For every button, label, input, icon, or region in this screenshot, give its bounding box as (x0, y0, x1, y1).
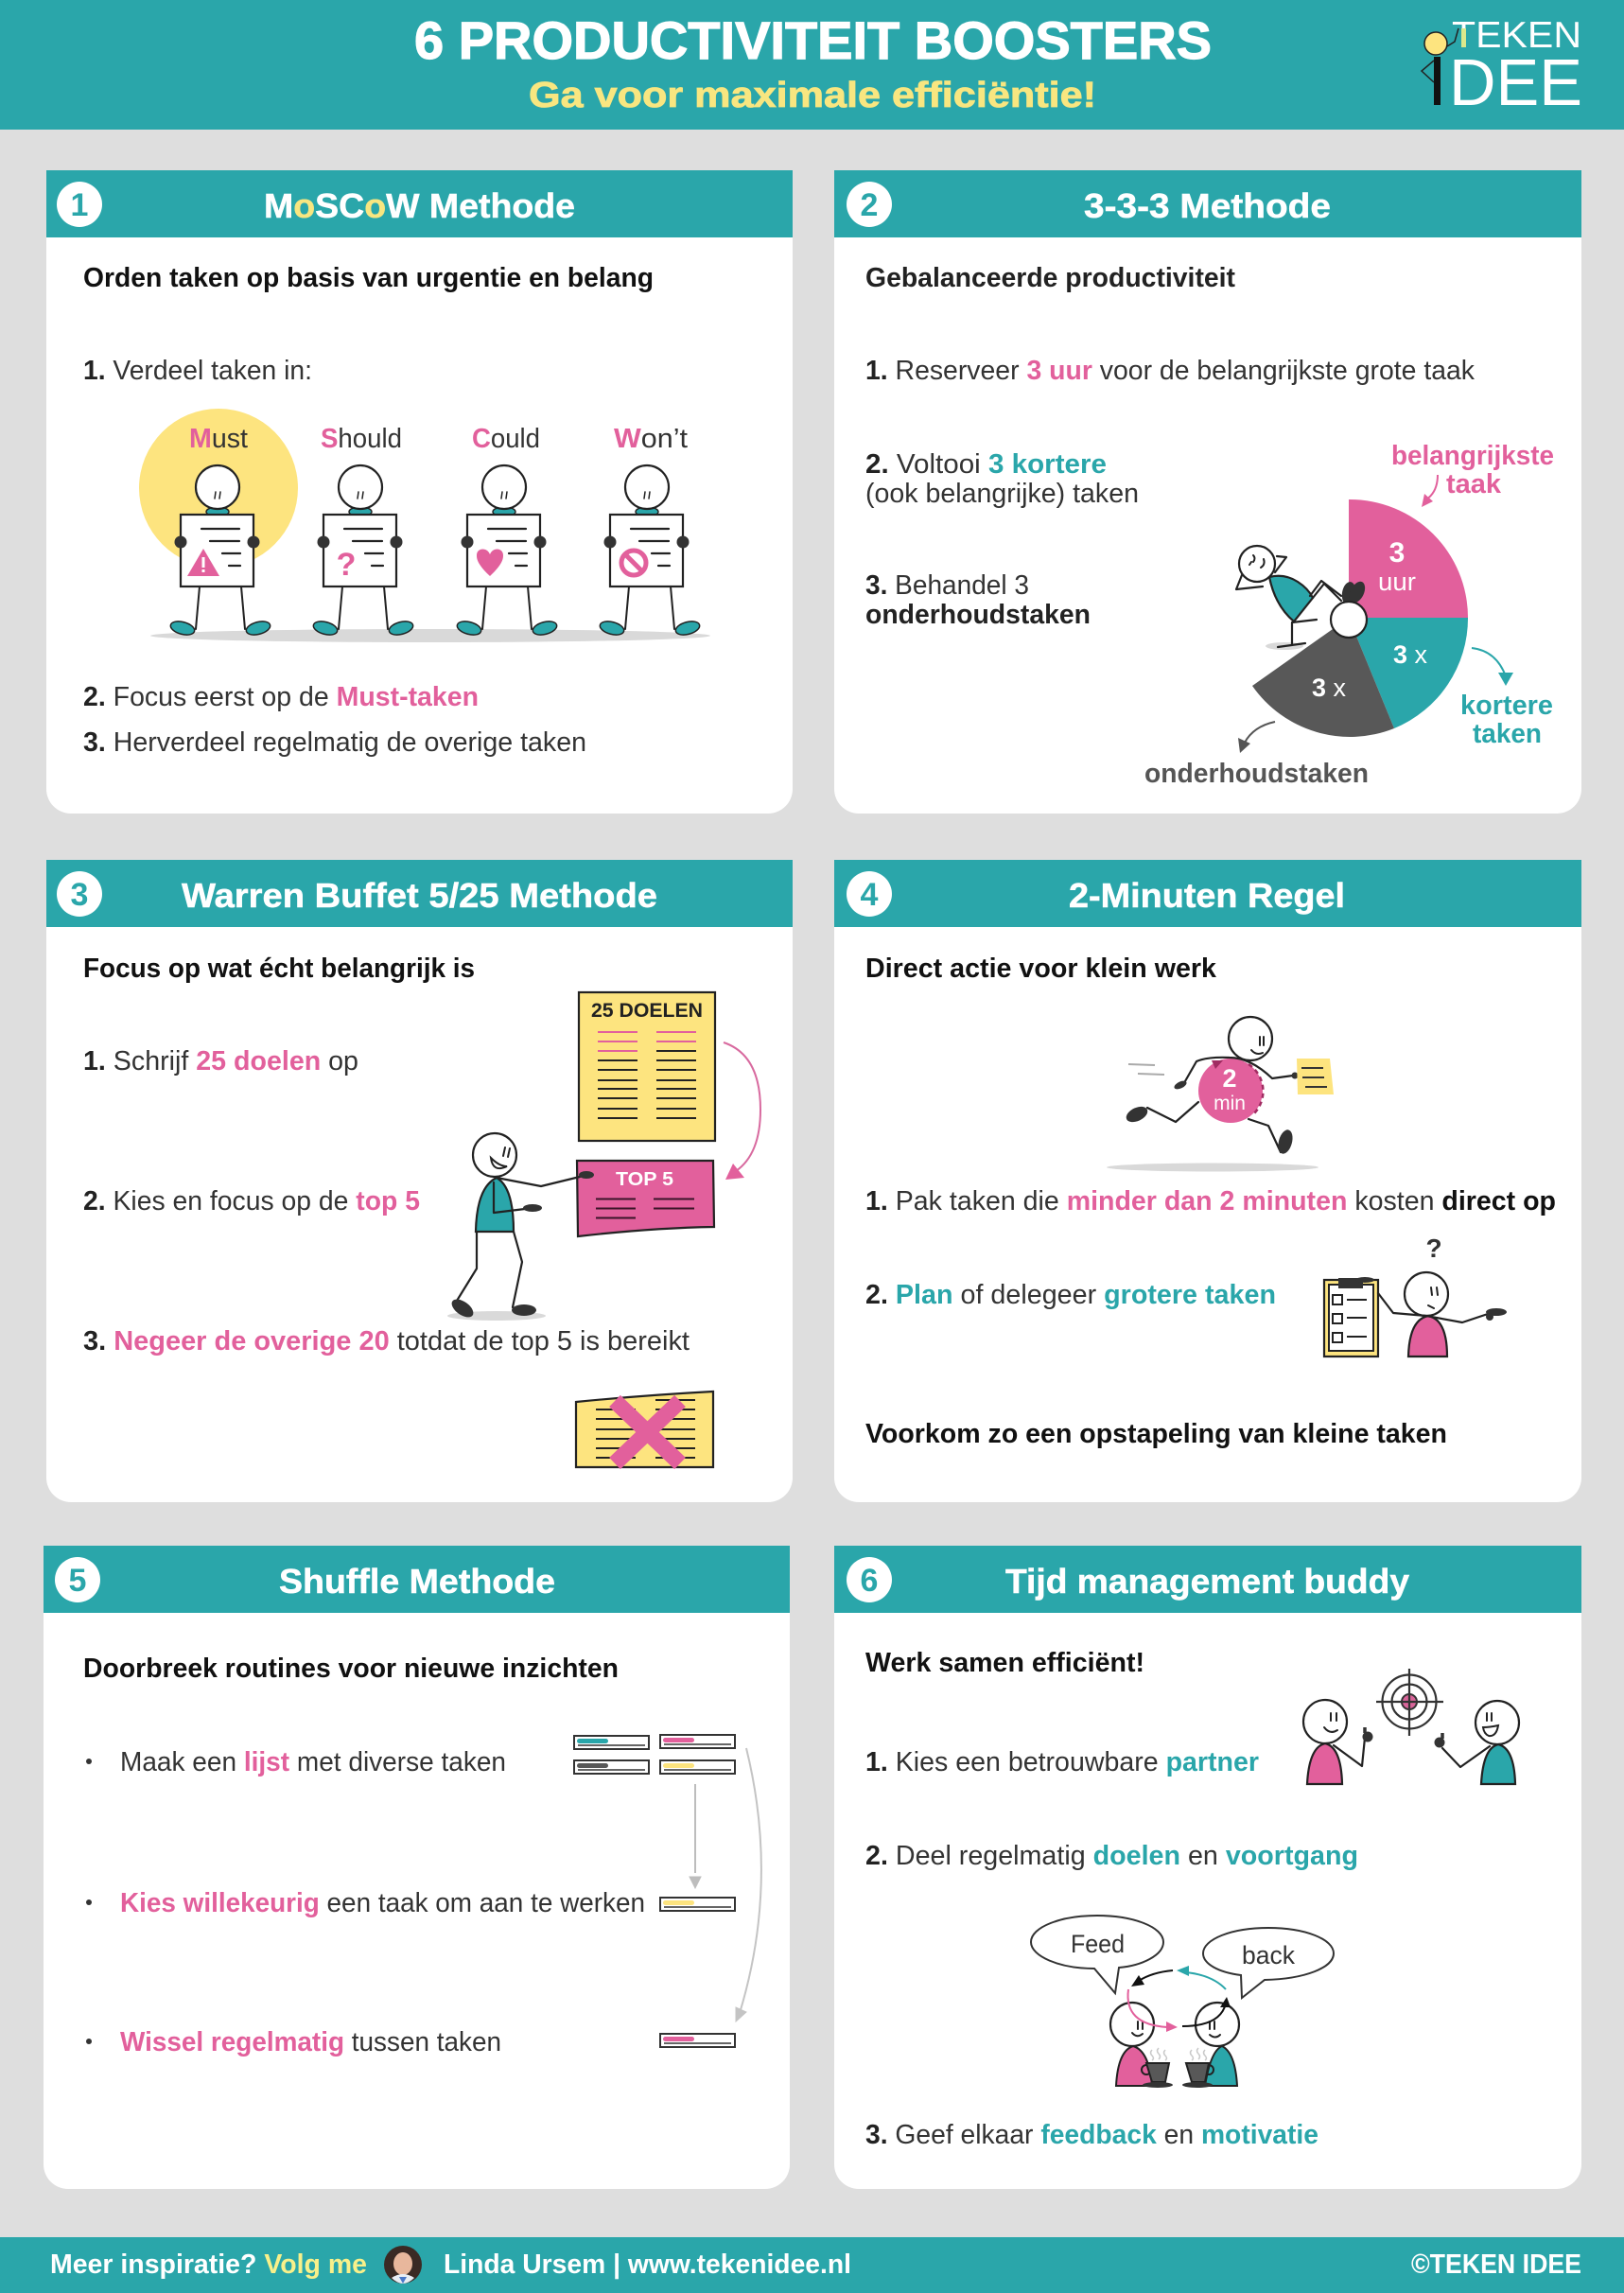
bullet 1: Maak een lijst met diverse taken (120, 1747, 506, 1777)
author and website: Linda Ursem | www.tekenidee.nl (444, 2249, 851, 2280)
subtitle: Ga voor maximale efficiëntie! (529, 76, 1096, 115)
pie chart: 3 (1389, 537, 1405, 569)
label Won't: Won’t (614, 424, 688, 454)
number badge 5 (55, 1557, 100, 1602)
subheading: Doorbreek routines voor nieuwe inzichten (83, 1654, 619, 1684)
speech bubble back (1203, 1928, 1334, 1998)
label onderhoudstaken: onderhoudstaken (1144, 759, 1369, 789)
pie chart: uur (1378, 568, 1416, 596)
pie chart: 3 x (1393, 640, 1427, 669)
number badge 2 (847, 182, 892, 227)
step 3: 3. Negeer de overige 20 totdat de top 5 is bereikt (83, 1326, 690, 1357)
number badge 2: 2 (861, 187, 878, 223)
call to action: Meer inspiratie? Volg me (50, 2249, 367, 2280)
figure Won't (599, 465, 701, 638)
figure with clipboard (1324, 1234, 1507, 1357)
pink task card (660, 2034, 735, 2047)
subheading: Gebalanceerde productiviteit (865, 263, 1235, 293)
number badge 6 (847, 1557, 892, 1602)
label Could: Could (472, 424, 540, 454)
speech bubble back: back (1242, 1941, 1295, 1969)
step 1: 1. Verdeel taken in: (83, 356, 312, 386)
closing statement: Voorkom zo een opstapeling van kleine taken (865, 1419, 1447, 1449)
feedback illustration (1031, 1916, 1334, 2088)
label belangrijkste taak (1391, 441, 1554, 499)
heading: 3-3-3 Methode (1084, 186, 1331, 225)
panel 4: 2-Minuten Regel (834, 860, 1581, 1502)
step 2: 2. Voltooi 3 kortere (865, 449, 1107, 480)
author photo (384, 2246, 422, 2284)
label belangrijkste taak: belangrijkste (1391, 441, 1554, 471)
step 3: 3. Herverdeel regelmatig de overige taken (83, 727, 586, 758)
figure Must (169, 465, 271, 638)
subheading: Werk samen efficiënt! (865, 1648, 1144, 1678)
step 2: 2. Deel regelmatig doelen en voortgang (865, 1841, 1358, 1871)
two seated figures with coffee (1110, 2003, 1239, 2088)
pie chart: 3 x (1312, 674, 1346, 702)
pie chart (1252, 499, 1468, 737)
illustration: four figures holding signs (139, 409, 710, 642)
list: 25 doelen (579, 992, 715, 1141)
list: top 5: TOP 5 (616, 1169, 673, 1190)
yellow task card (660, 1898, 735, 1911)
number badge 3: 3 (71, 877, 88, 913)
title: 6 PRODUCTIVITEIT BOOSTERS (414, 10, 1212, 70)
bullet 2: Kies willekeurig een taak om aan te werken (120, 1888, 645, 1918)
step 2: 2. Plan of delegeer grotere taken (865, 1280, 1276, 1310)
speech bubble Feed: Feed (1071, 1930, 1125, 1958)
step 1: 1. Reserveer 3 uur voor de belangrijkste grote taak (865, 356, 1475, 386)
figure Should: ? (337, 547, 356, 583)
arrow to grey label (1238, 722, 1275, 753)
label kortere taken: taken (1473, 719, 1542, 749)
label kortere taken: kortere (1460, 691, 1553, 721)
crossed out list (576, 1392, 713, 1467)
panel 6: Tijd management buddy (834, 1546, 1581, 2189)
stick figure pointing (447, 1133, 594, 1321)
number badge 1: 1 (71, 187, 88, 223)
arrow to pink slice (1422, 475, 1438, 507)
task cards group (574, 1735, 735, 1774)
copyright: ©TEKEN IDEE (1411, 2249, 1581, 2280)
number badge 5: 5 (69, 1563, 86, 1599)
heading: MoSCoW Methode (264, 186, 575, 225)
logo: Teken Idee: TEKEN (1452, 15, 1581, 56)
arrow to teal label (1472, 648, 1513, 686)
footer bar (0, 2237, 1624, 2293)
running figure with clock: min (1214, 1093, 1246, 1114)
label kortere taken (1460, 691, 1553, 749)
number badge 4: 4 (861, 877, 879, 913)
target with two figures (1303, 1669, 1519, 1784)
step 3: 3. Behandel 3 (865, 570, 1029, 601)
heading: Shuffle Methode (279, 1562, 555, 1601)
panel 5: Shuffle (44, 1546, 790, 2189)
step 2: 2. Focus eerst op de Must-taken (83, 682, 479, 712)
subheading: Direct actie voor klein werk (865, 954, 1217, 984)
step 1: 1. Schrijf 25 doelen op (83, 1046, 358, 1076)
list: top 5 (577, 1161, 714, 1236)
step 1: 1. Pak taken die minder dan 2 minuten kosten direct op (865, 1186, 1556, 1217)
subheading: Focus op wat écht belangrijk is (83, 954, 475, 984)
label Should: Should (321, 424, 402, 454)
feedback cycle arrows (1128, 1966, 1231, 2032)
figure with clipboard: ? (1425, 1234, 1442, 1263)
heading: 2-Minuten Regel (1069, 876, 1345, 915)
step 3 (865, 570, 1091, 630)
heading: Tijd management buddy (1005, 1562, 1409, 1601)
figure Should (312, 465, 414, 638)
panel 3: Warren Buffet (46, 860, 793, 1502)
logo: Teken Idee: DEE (1449, 45, 1582, 119)
reclining stick figure (1236, 546, 1368, 650)
step 2 (865, 449, 1139, 509)
running figure with clock (1107, 1017, 1334, 1171)
number badge 1 (57, 182, 102, 227)
label Must: Must (189, 424, 248, 454)
number badge 4 (847, 871, 892, 917)
label belangrijkste taak: taak (1446, 469, 1502, 499)
subheading: Orden taken op basis van urgentie en belang (83, 263, 654, 293)
step 2: (ook belangrijke) taken (865, 479, 1139, 509)
logo: Teken Idee (1422, 15, 1582, 119)
running figure with clock: 2 (1222, 1064, 1237, 1093)
heading: Warren Buffet 5/25 Methode (182, 876, 657, 915)
figure Could (456, 465, 558, 638)
step 3: onderhoudstaken (865, 600, 1091, 630)
curved arrow to pink card (736, 1748, 761, 2022)
bullet 3: Wissel regelmatig tussen taken (120, 2027, 501, 2057)
speech bubble Feed (1031, 1916, 1163, 1993)
step 1: 1. Kies een betrouwbare partner (865, 1747, 1259, 1777)
header banner (0, 0, 1624, 130)
panel 1: MoSCoW (46, 170, 793, 814)
curved arrow to top 5 (724, 1042, 760, 1180)
list: 25 doelen: 25 DOELEN (591, 1000, 703, 1022)
step 3: 3. Geef elkaar feedback en motivatie (865, 2120, 1318, 2150)
step 2: 2. Kies en focus op de top 5 (83, 1186, 420, 1217)
number badge 6: 6 (861, 1563, 878, 1599)
panel 2: 3-3-3 (834, 170, 1581, 814)
arrow down to yellow card (690, 1784, 701, 1888)
number badge 3 (57, 871, 102, 917)
